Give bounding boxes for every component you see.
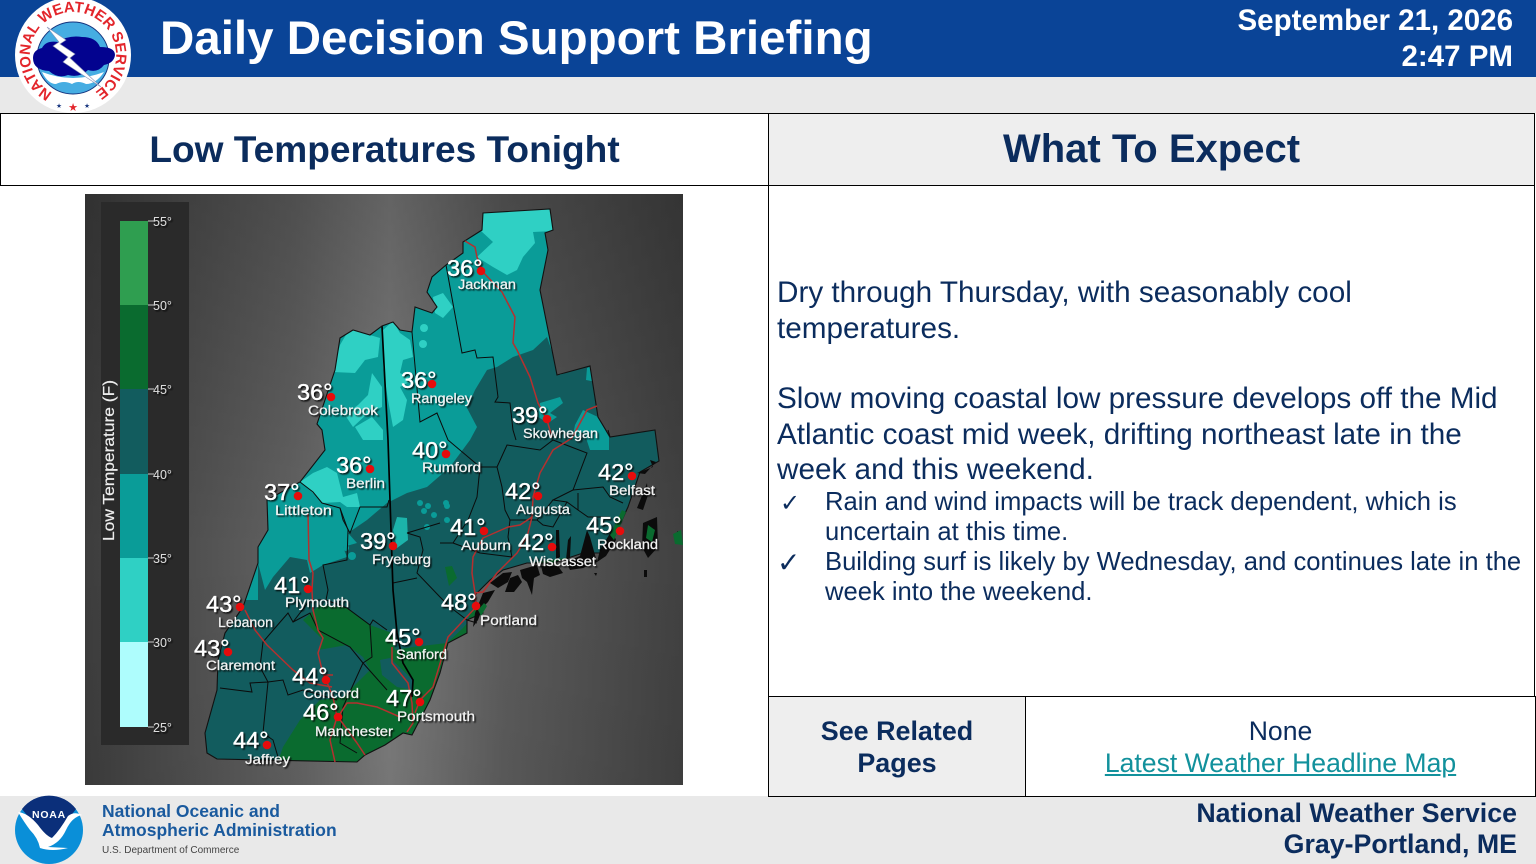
state outline (205, 209, 659, 762)
mid teal pockets inside dark (343, 366, 609, 560)
text: dry through Thursday: Dry through Thursday, with seasonably cool (777, 276, 1352, 309)
icon: NWS logo: ★ (56, 102, 62, 110)
station: Concord: Concord (303, 686, 359, 701)
station: Sanford (385, 624, 447, 662)
text: coastal low pressure: Slow moving coastal low pressure develops off the Mid (777, 382, 1498, 415)
station: Littleton: Littleton (275, 503, 332, 518)
station: Portsmouth: Portsmouth (397, 709, 475, 724)
legend: 45° (153, 383, 172, 397)
NH/ME state line (382, 326, 413, 697)
bullet: rain and wind: uncertain at this time. (825, 518, 1068, 546)
date and time: September 21, 2026 (1238, 4, 1513, 37)
panel: right heading (768, 113, 1535, 186)
NOAA text (102, 801, 337, 856)
bullet: rain and wind: ✓ (780, 489, 800, 517)
station: Rockland: Rockland (597, 537, 658, 552)
icon: NOAA logo (15, 796, 83, 864)
station: Fryeburg (360, 528, 431, 567)
icon: NWS logo: NATIONAL WEATHER SERVICE (20, 2, 127, 101)
station: Auburn (450, 514, 511, 553)
station: Berlin (336, 452, 385, 491)
station: Portsmouth: 47° (386, 685, 422, 711)
office name: Gray-Portland, ME (1284, 828, 1517, 858)
temperature fill regions (190, 200, 670, 770)
station: Wiscasset: Wiscasset (529, 554, 596, 569)
coastal islands (473, 460, 681, 627)
station: Plymouth (274, 572, 349, 610)
station: Augusta (505, 478, 571, 517)
station: Colebrook: Colebrook (308, 403, 378, 418)
panel: related links (1025, 696, 1536, 797)
station: Littleton (264, 479, 332, 518)
station: Wiscasset: 42° (518, 529, 554, 555)
panel: what to expect body (768, 185, 1535, 697)
station: Claremont: 43° (194, 635, 230, 661)
station: Auburn: 41° (450, 514, 486, 540)
station: Lebanon (206, 591, 273, 630)
bullet: building surf: week into the weekend. (825, 578, 1092, 606)
icon: NWS logo: ★ (68, 102, 78, 114)
station: Portland: 48° (441, 589, 477, 615)
date and time (1238, 4, 1513, 73)
legend (101, 202, 189, 745)
panel: left heading (0, 113, 769, 186)
station: Skowhegan: Skowhegan (523, 426, 598, 441)
panel: related links: Latest Weather Headline Map (1105, 748, 1456, 778)
legend: 50° (153, 299, 172, 313)
station: Jaffrey: 44° (233, 727, 269, 753)
text: coastal low pressure: week and this weekend. (777, 453, 1094, 486)
station: Skowhegan (512, 402, 598, 441)
highways (245, 241, 597, 762)
text: dry through Thursday (777, 276, 1352, 344)
station: Rockland: 45° (586, 512, 622, 538)
station: Sanford: Sanford (396, 647, 447, 662)
office name: National Weather Service (1196, 798, 1517, 828)
station: Wiscasset (518, 529, 596, 569)
icon: NOAA logo: NOAA (32, 809, 66, 821)
NOAA text: Atmospheric Administration (102, 820, 337, 840)
icon: NWS logo: ★ (84, 102, 90, 110)
45-50 green (278, 605, 466, 762)
station: Plymouth: Plymouth (285, 595, 349, 610)
panel border over footer (768, 796, 1536, 797)
panel: see related pages label: See Related (821, 716, 973, 746)
station: Berlin: Berlin (346, 476, 385, 491)
station: Portland (441, 589, 537, 628)
county boundaries (220, 265, 623, 757)
legend: Low Temperature (F) (101, 380, 118, 541)
bullet: rain and wind: Rain and wind impacts will be track dependent, which is (825, 488, 1457, 516)
station: Rangeley (401, 367, 472, 406)
bullet: building surf (777, 546, 1521, 606)
station: Augusta: 42° (505, 478, 541, 504)
station: Lebanon: Lebanon (218, 615, 273, 630)
bullet: building surf: Building surf is likely by Wednesday, and continues late in the (825, 548, 1521, 576)
title: Daily Decision Support Briefing (160, 12, 873, 65)
station: Augusta: Augusta (516, 502, 571, 517)
station: Colebrook: 36° (297, 379, 333, 405)
bullet: rain and wind (780, 488, 1457, 546)
40-45 dark (190, 337, 670, 770)
NOAA text: U.S. Department of Commerce (102, 845, 239, 856)
station: Portland: Portland (480, 613, 537, 628)
station: Lebanon: 43° (206, 591, 242, 617)
station: Belfast: 42° (598, 459, 634, 485)
text: coastal low pressure (777, 382, 1498, 486)
station: Sanford: 45° (385, 624, 421, 650)
legend: 35° (153, 552, 172, 566)
station: Claremont (194, 635, 275, 673)
station: Rockland (586, 512, 658, 552)
bullet: building surf: ✓ (777, 546, 800, 579)
station: Littleton: 37° (264, 479, 300, 505)
station: Berlin: 36° (336, 452, 372, 478)
station: Portsmouth (386, 685, 475, 724)
station: Belfast (598, 459, 655, 498)
station: Colebrook (297, 379, 378, 418)
station: Jackman: 36° (447, 255, 483, 281)
station: Concord: 44° (292, 663, 328, 689)
NOAA text: National Oceanic and (102, 801, 280, 821)
legend: 30° (153, 636, 172, 650)
station: Jackman: Jackman (458, 277, 516, 292)
station: Skowhegan: 39° (512, 402, 548, 428)
station: Rumford (412, 437, 481, 475)
station: Manchester (303, 699, 394, 739)
station: Belfast: Belfast (609, 483, 655, 498)
station: Jackman (447, 255, 516, 292)
station: Rumford: Rumford (422, 460, 481, 475)
text: coastal low pressure: Atlantic coast mid week, drifting northeast late in the (777, 418, 1462, 450)
30-35 shading north (300, 210, 552, 507)
footer band (0, 796, 1536, 864)
station: Claremont: Claremont (206, 658, 275, 673)
chart: low temperature map (85, 194, 683, 785)
sub-header grey band (0, 77, 1536, 113)
station: Jaffrey (233, 727, 290, 767)
station: Rangeley: Rangeley (411, 391, 472, 406)
station: Jaffrey: Jaffrey (245, 752, 290, 767)
date and time: 2:47 PM (1402, 40, 1513, 73)
legend: 55° (153, 215, 172, 229)
station: Fryeburg: 39° (360, 528, 396, 554)
station: Fryeburg: Fryeburg (372, 552, 431, 567)
office name (1196, 798, 1517, 858)
text: dry through Thursday: temperatures. (777, 312, 960, 344)
panel: left heading: Low Temperatures Tonight (149, 128, 620, 170)
station: Concord (292, 663, 359, 701)
panel: see related pages label (768, 696, 1026, 797)
legend: 40° (153, 468, 172, 482)
station: Manchester: 46° (303, 699, 339, 725)
panel: see related pages label: Pages (857, 748, 937, 778)
station: Rangeley: 36° (401, 367, 437, 393)
station: Rumford: 40° (412, 437, 448, 463)
panel: related links: None (1249, 716, 1312, 746)
station: Manchester: Manchester (315, 724, 394, 739)
station: Plymouth: 41° (274, 572, 310, 598)
header band (0, 0, 1536, 77)
legend: 25° (153, 721, 172, 735)
station: Auburn: Auburn (461, 538, 511, 553)
panel: right heading: What To Expect (1003, 127, 1300, 171)
